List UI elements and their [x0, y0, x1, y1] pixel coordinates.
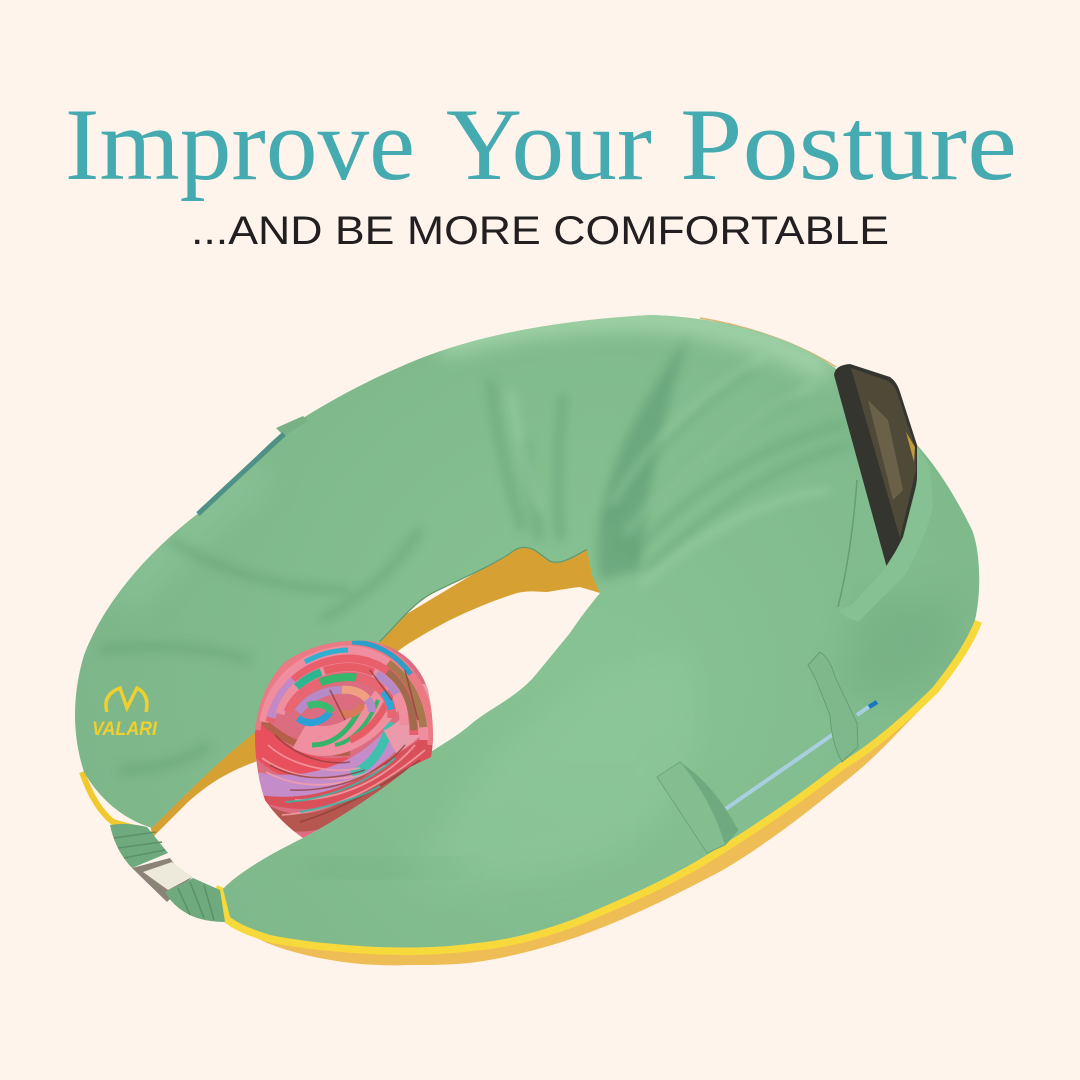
logo: [92, 688, 158, 740]
subtitle: ...AND BE MORE COMFORTABLE: [191, 209, 889, 253]
phone in pocket: [834, 364, 918, 568]
pocket seam: [838, 480, 857, 607]
lower flap: [657, 762, 738, 853]
title: [65, 95, 1017, 202]
fabric shading and folds: [100, 318, 960, 886]
product illustration: nursing pillow: [75, 315, 982, 966]
clasp: left elastic: [110, 824, 168, 868]
yellow piping: [222, 620, 975, 948]
side pocket slot: [198, 416, 308, 514]
gold base: [225, 625, 975, 965]
clasp: metal buckle: [132, 858, 192, 902]
clasp: right elastic: [165, 878, 225, 922]
green pillow body: [75, 315, 979, 948]
strap loop: [808, 652, 858, 762]
left lobe piping: [82, 772, 152, 835]
inner gold lining: [150, 540, 600, 837]
zipper: [714, 702, 877, 817]
hump edge: [700, 318, 836, 367]
yarn ball: [250, 635, 440, 840]
pocket flap: [838, 447, 933, 622]
logo: VALARI: [92, 719, 158, 740]
